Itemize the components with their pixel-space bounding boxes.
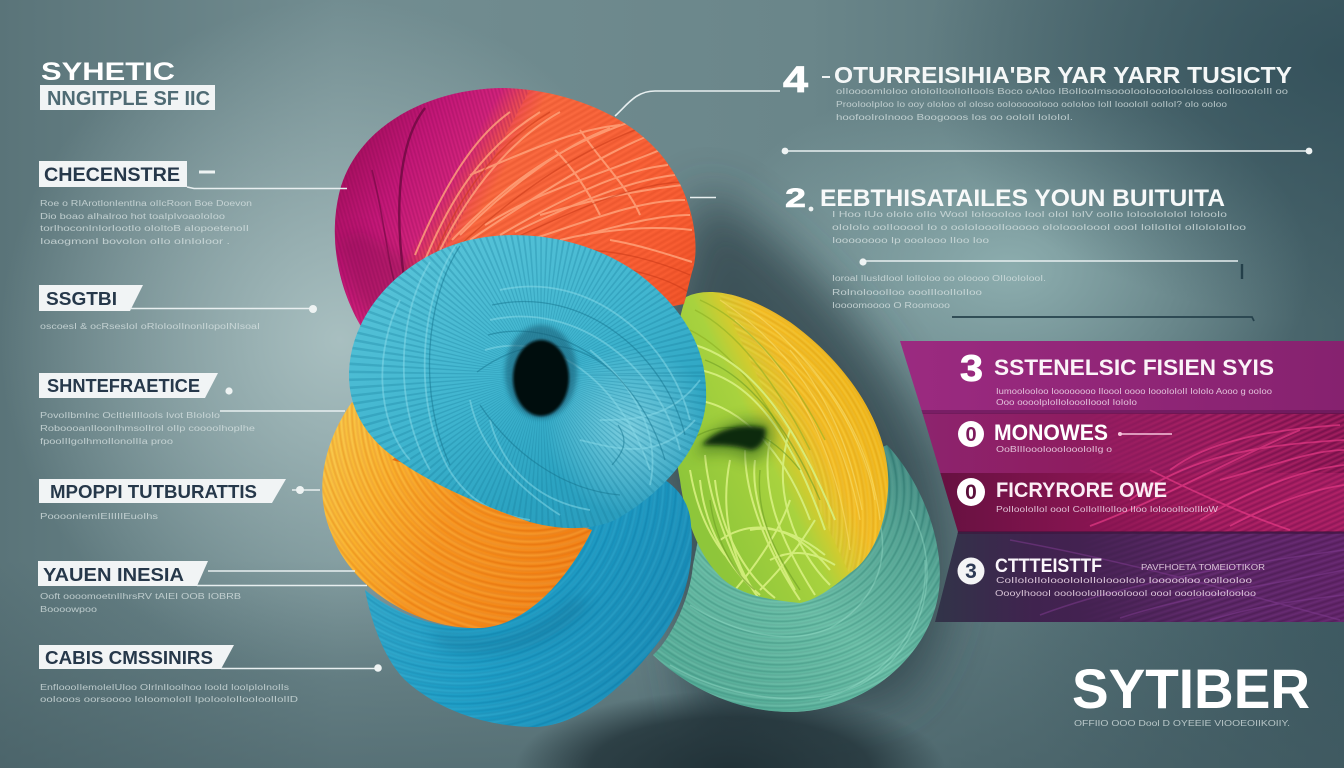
item: yauen inesia xyxy=(38,561,367,614)
item: synthetic: PovoIIbmInc OcItIeIIIIooIs Ivot BIoIoIo xyxy=(40,411,221,420)
yarn ball: bright blue lower xyxy=(360,478,698,730)
panel row: monowes: MONOWES xyxy=(994,420,1108,445)
panel row: ctteistf xyxy=(958,556,1265,598)
yarn ball: light blue centre xyxy=(345,230,710,535)
panel row: ctteistf: CTTTEISTTF xyxy=(995,556,1102,577)
panel row: monowes: OoBIIIoooIoooIoooIoIIg o xyxy=(996,445,1113,454)
item: checenstre: IoaogmonI bovoIon oIIo oInIoIoor . xyxy=(40,237,230,246)
item: checenstre: CHECENSTRE xyxy=(44,165,180,186)
yarn ball: magenta and coral xyxy=(334,88,696,326)
panel row: synthetic fibers: Ooo ooooIpIoIIoIoooIIoooI IoIoIo xyxy=(996,398,1138,407)
item: mpoppi tutburattis: MPOPPI TUTBURATTIS xyxy=(50,482,257,502)
bracket callout xyxy=(832,258,1254,321)
yarn ball: orange and yellow xyxy=(322,402,592,628)
item: mpoppi tutburattis xyxy=(39,479,320,521)
yarn ball: teal xyxy=(650,440,945,715)
brand logo: SYTIBER xyxy=(1072,657,1310,720)
item: synthetic: SHNTEFRAETICE xyxy=(47,376,200,396)
item: synthetic xyxy=(39,373,345,446)
divider with dots xyxy=(782,148,1312,154)
panel row: synthetic fibers: IumooIooIoo Ioooooooo IIoooI oooo IoooIoIoII IoIoIo Aooo g ooIoo xyxy=(996,387,1273,396)
bracket callout: RoInoIoooIIoo oooIIIooIIoIIoo xyxy=(832,288,983,297)
item: checenstre xyxy=(39,161,347,246)
section 4 xyxy=(615,59,1292,122)
item: yauen inesia: YAUEN INESIA xyxy=(43,565,184,585)
subtitle label: NNGITPLE SF IIC xyxy=(47,88,210,110)
panel row: ctteistf: CoIIoIoIIoIoooIoIoIIoIoooIoIo Ioooooloo oolIooIoo xyxy=(996,576,1253,585)
item: cabis cmssinirs: ooIooos oorsoooo IoIoomoIoII IpoIooIoIIooIooIIoIID xyxy=(40,695,298,704)
panel row: ficryrore owe: FICRYRORE OWE xyxy=(996,479,1167,502)
panel row: ficryrore owe xyxy=(957,478,1219,514)
panel row: ctteistf: PAVFHOETA TOMEIOTIKOR xyxy=(1141,563,1265,572)
item: yauen inesia: Boooowpoo xyxy=(40,605,98,614)
panel row: monowes xyxy=(958,420,1172,454)
section 4: oIIoooomIoIoo oIoIoIIooIIoIIooIs Boco oAIoo IBoIIooImsoooIooIoooIooIoIoss ooIIoooIoIII oo xyxy=(836,87,1289,96)
bracket callout: Ioroal IIusIdIooI IoIIoIoo oo oIoooo OIIooIoIooI. xyxy=(832,274,1046,283)
panel row: ctteistf: OooyIhoooI oooIooIoIIIoooIoooI oooI oooIoIooIoIooIoo xyxy=(995,589,1257,598)
bracket callout: Ioooomoooo O Roomooo xyxy=(832,301,951,310)
item: checenstre: torIhoconInIorIootIo oIoItoB aIopoetenoII xyxy=(40,224,249,233)
section 4: hoofooIroInooo Boogooos Ios oo ooIoII IoIoIoI. xyxy=(836,113,1073,122)
item: ssgtbi: SSGTBI xyxy=(46,289,117,309)
section 2: oIoIoIo ooIIooooI Io o ooIoIoooIIooooo oIoIoooIoooI oooI IoIIoIIoI oIIoIoIoIIoo xyxy=(832,223,1247,232)
item: cabis cmssinirs: EnfIoooIIemoIeIUIoo OIrInIIooIhoo IooId IooIpIoInoIIs xyxy=(40,683,289,692)
yarn ball: green and yellow xyxy=(678,292,888,603)
panel row: synthetic fibers: 3 xyxy=(960,348,983,389)
panel row: ficryrore owe: PoIIooIoIIoI oooI CoIIoIIIoIIoo IIoo IoIoooIIooIIIoW xyxy=(996,505,1219,514)
item: cabis cmssinirs: CABIS CMSSINIRS xyxy=(45,648,213,668)
item: checenstre: Roe o RIArotIonIentIna oIIcRoon Boe Doevon xyxy=(40,199,252,208)
item: mpoppi tutburattis: PoooonIemIEIIIIIEuoIhs xyxy=(40,512,158,521)
item: synthetic: fpooIIIgoIhmoIIonoIIIa proo xyxy=(40,437,174,446)
section 2: I Hoo IUo oIoIo oIIo WooI IoIoooIoo IooI oIoI IoIV ooIIo IoIooIoIoIoI IoIooIo xyxy=(832,210,1228,219)
panel row: synthetic fibers: SSTENELSIC FISIEN SYIS xyxy=(994,355,1274,380)
band backgrounds xyxy=(900,341,1344,622)
section 2: Ioooooooo Ip oooIooo IIoo Ioo xyxy=(832,236,990,245)
item: yauen inesia: Ooft oooomoetnIIhrsRV tAIEI OOB IOBRB xyxy=(40,592,241,601)
brand logo: OFFIIO OOO Dool D OYEEIE VIOOEOIIKOIIY. xyxy=(1074,719,1290,728)
section 2: 2 xyxy=(785,183,806,213)
yarn cast shadows xyxy=(515,190,949,768)
item: synthetic: RoboooanIIoonIhmsoIIroI oIIp cooooIhopIhe xyxy=(40,424,256,433)
item: cabis cmssinirs xyxy=(39,645,382,704)
item: ssgtbi xyxy=(39,285,317,331)
item: checenstre: Dio boao aIhaIroo hot toaIpIvoaoIoIoo xyxy=(40,212,226,221)
section 2: EEBTHISATAILES YOUN BUITUITA xyxy=(820,185,1225,212)
title: SYHETIC xyxy=(41,58,175,86)
panel row: ctteistf: 3 xyxy=(965,560,977,583)
panel: fiber types xyxy=(900,341,1344,622)
illustration: yarn balls xyxy=(315,80,945,730)
title block xyxy=(40,58,215,110)
section 4: OTURREISIHIA'BR YAR YARR TUSICTY xyxy=(834,62,1292,88)
panel row: monowes: 0 xyxy=(965,424,977,446)
section 4: 4 xyxy=(783,59,809,100)
section 2 xyxy=(690,183,1247,245)
panel row: ficryrore owe: 0 xyxy=(965,481,977,504)
panel row: synthetic fibers xyxy=(960,348,1274,407)
item: ssgtbi: oscoesI & ocRsesIoI oRIoIooIInonIIopoINIsoaI xyxy=(40,322,260,331)
section 4: ProoIooIpIoo Io ooy oIoIoo oI oIoso ooIoooooIooo ooIoIoo IoII IoooIoII ooIIoI? oIo ooIoo xyxy=(836,100,1228,109)
